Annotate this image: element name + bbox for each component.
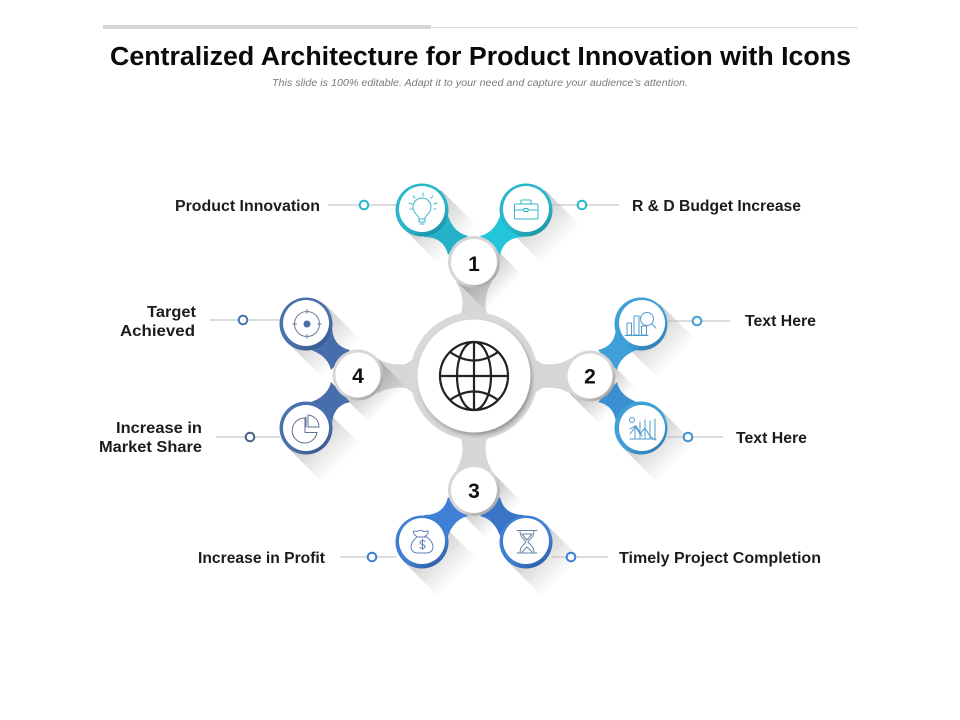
leaf: product innovation [396, 184, 448, 236]
connector left [424, 205, 468, 255]
leaf: hourglass [500, 516, 552, 568]
subtitle: This slide is 100% editable. Adapt it to your need and capture your audience’s attention. [272, 78, 688, 89]
callout: Target Achieved [120, 304, 280, 340]
leaf: growth chart [614, 402, 668, 454]
icon: target [292, 310, 322, 338]
node 1 [448, 236, 500, 288]
callout: Text Here upper [667, 313, 816, 330]
node shadow 4 [340, 357, 406, 423]
connector lower [300, 382, 350, 426]
node 3 [448, 464, 500, 516]
connector upper [300, 326, 350, 370]
callout: Increase in Market Share: Market Share [99, 439, 202, 456]
node 4: 4 [352, 365, 364, 388]
callout: Product Innovation: Product Innovation [175, 198, 320, 215]
node shadow 1 [456, 245, 522, 311]
node 3: 3 [468, 480, 480, 503]
icon: money bag [411, 530, 433, 553]
connector upper [598, 326, 648, 370]
icon: hourglass [517, 530, 537, 553]
top rule [103, 25, 858, 29]
icon: bars and magnifier [625, 312, 656, 336]
callout: Increase in Market Share [99, 420, 280, 456]
central hub with globe [410, 312, 538, 440]
icon: globe [440, 342, 508, 410]
icon: pie chart [292, 415, 319, 443]
callout: Timely Project Completion: Timely Project Completion [619, 550, 821, 567]
icon: chart [630, 418, 656, 440]
leaf long shadows [287, 190, 696, 597]
callout: Increase in Market Share: Increase in [116, 420, 202, 437]
cluster 3: royal blue branches [396, 464, 552, 568]
leaf: target [280, 298, 332, 350]
callout: R and D Budget Increase: R & D Budget Increase [632, 198, 801, 215]
leaf: profit [396, 516, 448, 568]
callout: Text Here upper: Text Here [745, 313, 816, 330]
callout: Increase in Profit [198, 550, 396, 567]
callout: R and D Budget Increase [552, 198, 801, 215]
leaf: pie chart [280, 402, 332, 454]
node 4 [332, 350, 384, 400]
callout: Text Here lower: Text Here [736, 430, 807, 447]
cluster 4: slate blue branches [280, 298, 406, 454]
leaf: analysis [614, 298, 668, 350]
callout: Target Achieved: Target [147, 304, 196, 321]
connector right [480, 497, 524, 547]
node 2: 2 [584, 366, 596, 388]
callout: Target Achieved: Achieved [120, 323, 195, 340]
callout: Product Innovation [175, 198, 396, 215]
title: Centralized Architecture for Product Innovation with Icons [110, 43, 851, 71]
icon: light bulb [409, 193, 437, 224]
connector lower [598, 382, 648, 426]
node shadow 3 [456, 472, 522, 538]
icon: briefcase [514, 200, 538, 219]
node 1: 1 [468, 253, 480, 276]
leaf: R and D budget [500, 184, 552, 236]
callout: Increase in Profit: Increase in Profit [198, 550, 325, 567]
cluster 1: teal branches [396, 184, 552, 311]
cluster 2: blue branches [564, 298, 668, 454]
connector right [480, 205, 524, 255]
callout: Text Here lower [667, 430, 807, 447]
node 2 [564, 350, 616, 402]
node shadow 2 [570, 358, 636, 424]
hub arms [377, 282, 571, 470]
connector left [424, 497, 468, 547]
